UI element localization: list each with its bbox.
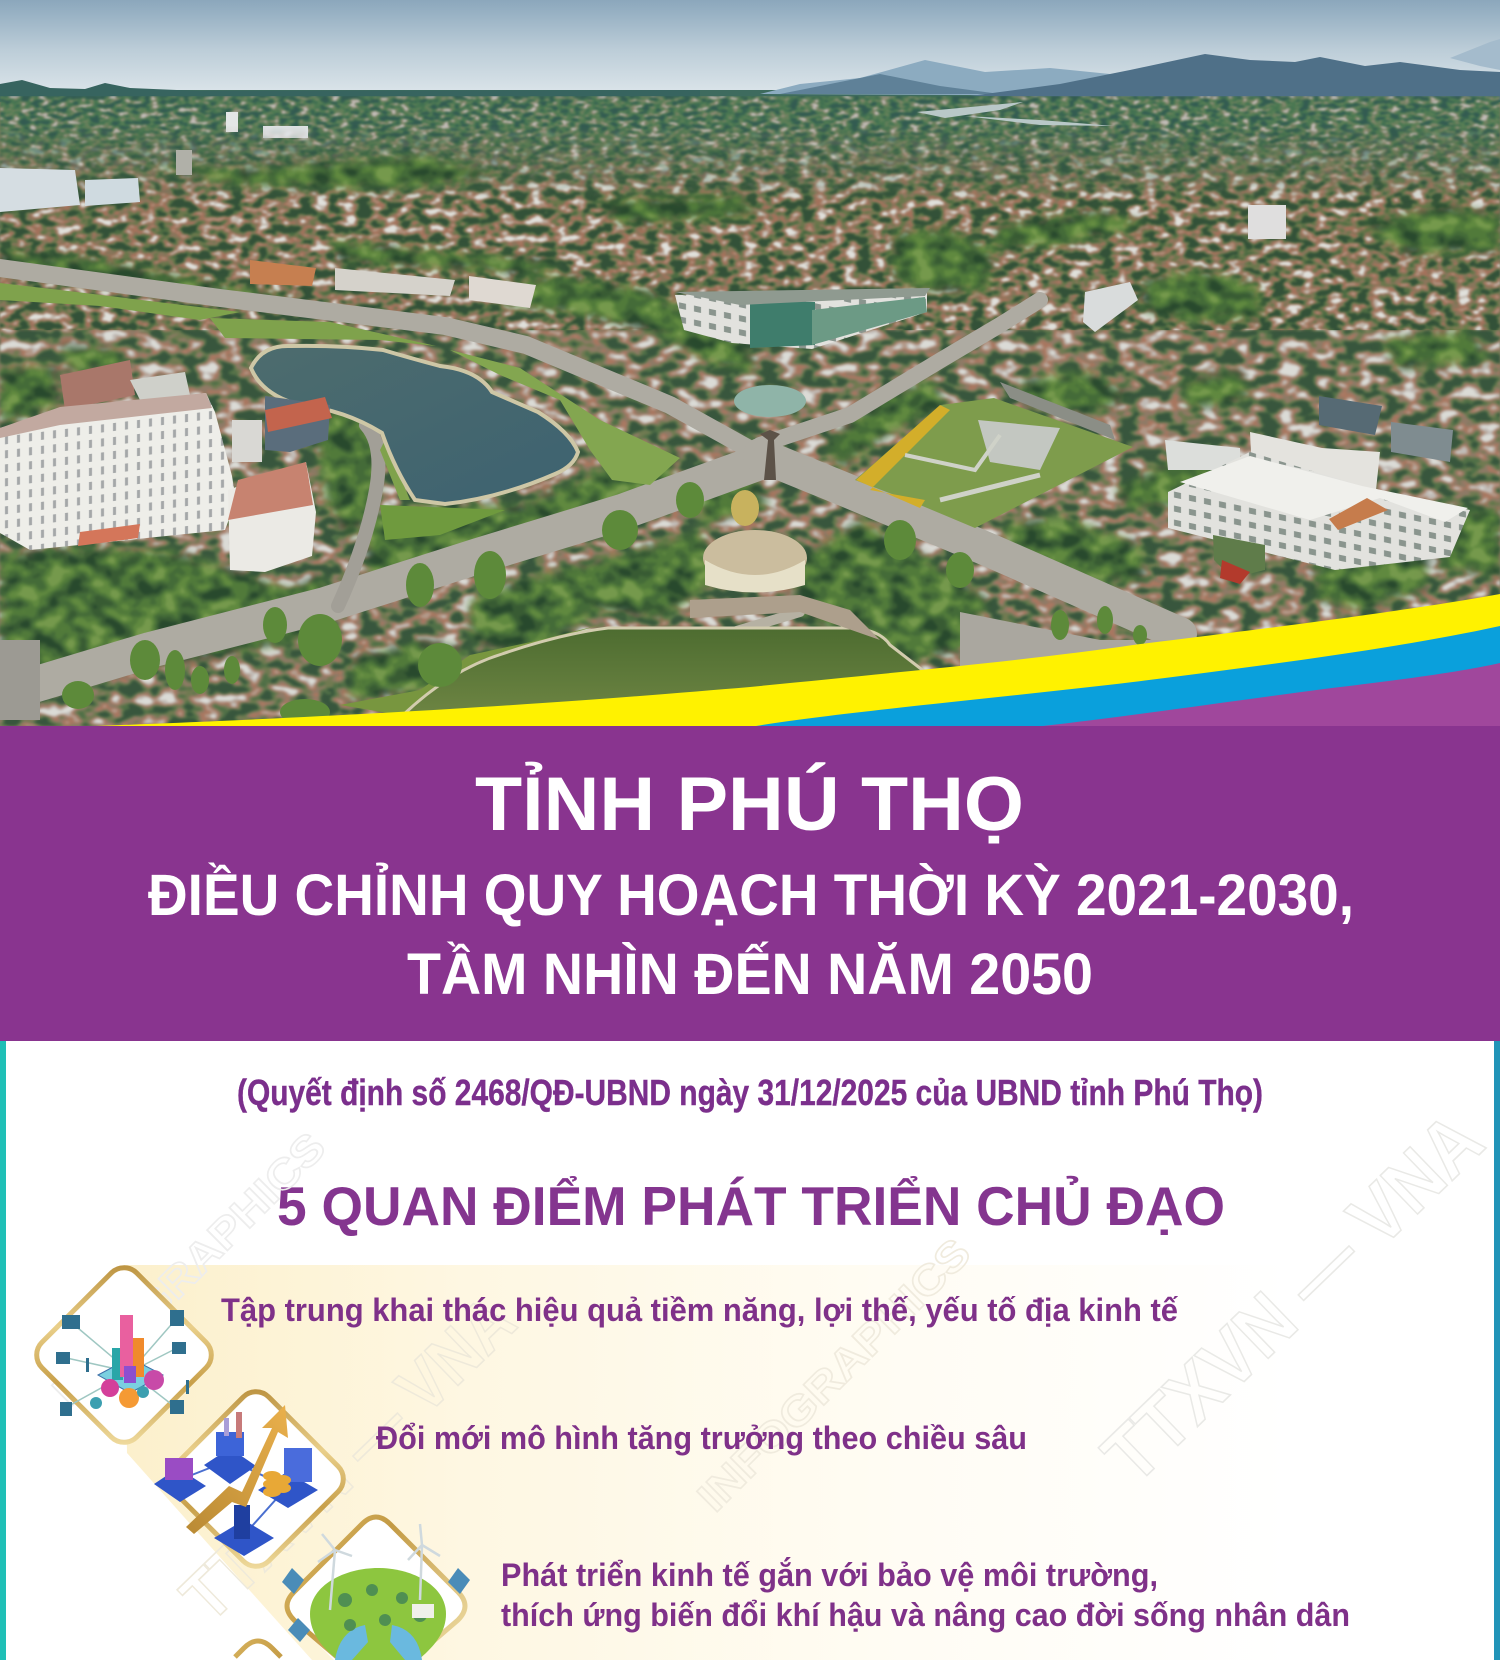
gold growth arrow <box>186 1405 288 1534</box>
title: TỈNH PHÚ THỌ <box>475 762 1024 847</box>
icon: data analytics diamond <box>29 1260 219 1450</box>
central green-roofed building <box>675 288 930 349</box>
icon: green environment diamond <box>282 1517 470 1660</box>
panel: purple title band <box>0 726 1500 1041</box>
subtitle line 1: ĐIỀU CHỈNH QUY HOẠCH THỜI KỲ 2021-2030, <box>148 863 1354 928</box>
far town texture <box>0 96 1500 246</box>
garden park <box>855 382 1133 528</box>
small houses by the lake <box>60 360 332 462</box>
lower lake <box>402 628 925 720</box>
cream background band <box>124 1265 1494 1660</box>
watermarks: TTXVN — VNA <box>166 1281 530 1636</box>
distant mountains <box>0 39 1500 100</box>
tree clusters <box>0 140 1500 726</box>
white hotel <box>0 393 236 550</box>
watermarks: INFOGRAPHICS <box>688 1229 979 1520</box>
upper lawns <box>0 283 680 715</box>
white office complex <box>1165 432 1470 584</box>
city texture <box>0 125 1500 345</box>
north-east white buildings <box>0 150 1453 462</box>
icon: fourth diamond (cropped) <box>232 1641 284 1660</box>
watermarks: INFOGRAPHICS <box>43 1123 334 1414</box>
lower foreground foliage <box>62 482 1147 725</box>
colour ribbon <box>96 594 1500 726</box>
point 3 text: Phát triển kinh tế gắn với bảo vệ môi trường, <box>501 1557 1158 1593</box>
icon: growth model diamond <box>154 1384 351 1574</box>
point 2 text: Đổi mới mô hình tăng trưởng theo chiều sâu <box>376 1420 1027 1456</box>
upper lake <box>251 346 578 504</box>
content side borders <box>0 1041 1500 1660</box>
subtitle line 2: TẦM NHÌN ĐẾN NĂM 2050 <box>407 942 1093 1007</box>
near houses texture <box>0 330 1500 726</box>
panel: aerial city photograph <box>0 0 1500 726</box>
road network <box>0 268 1180 712</box>
decision reference: (Quyết định số 2468/QĐ-UBND ngày 31/12/2025 của UBND tỉnh Phú Thọ) <box>237 1072 1263 1113</box>
point 1 text: Tập trung khai thác hiệu quả tiềm năng, lợi thế, yếu tố địa kinh tế <box>221 1292 1178 1328</box>
point 3 text <box>501 1557 1350 1633</box>
point 3 text: thích ứng biến đổi khí hậu và nâng cao đời sống nhân dân <box>501 1597 1350 1633</box>
section heading: 5 QUAN ĐIỂM PHÁT TRIỂN CHỦ ĐẠO <box>277 1175 1225 1237</box>
watermarks <box>43 1096 1499 1636</box>
central fountain, tower and rotunda <box>690 385 880 640</box>
hotel annex <box>228 462 316 572</box>
